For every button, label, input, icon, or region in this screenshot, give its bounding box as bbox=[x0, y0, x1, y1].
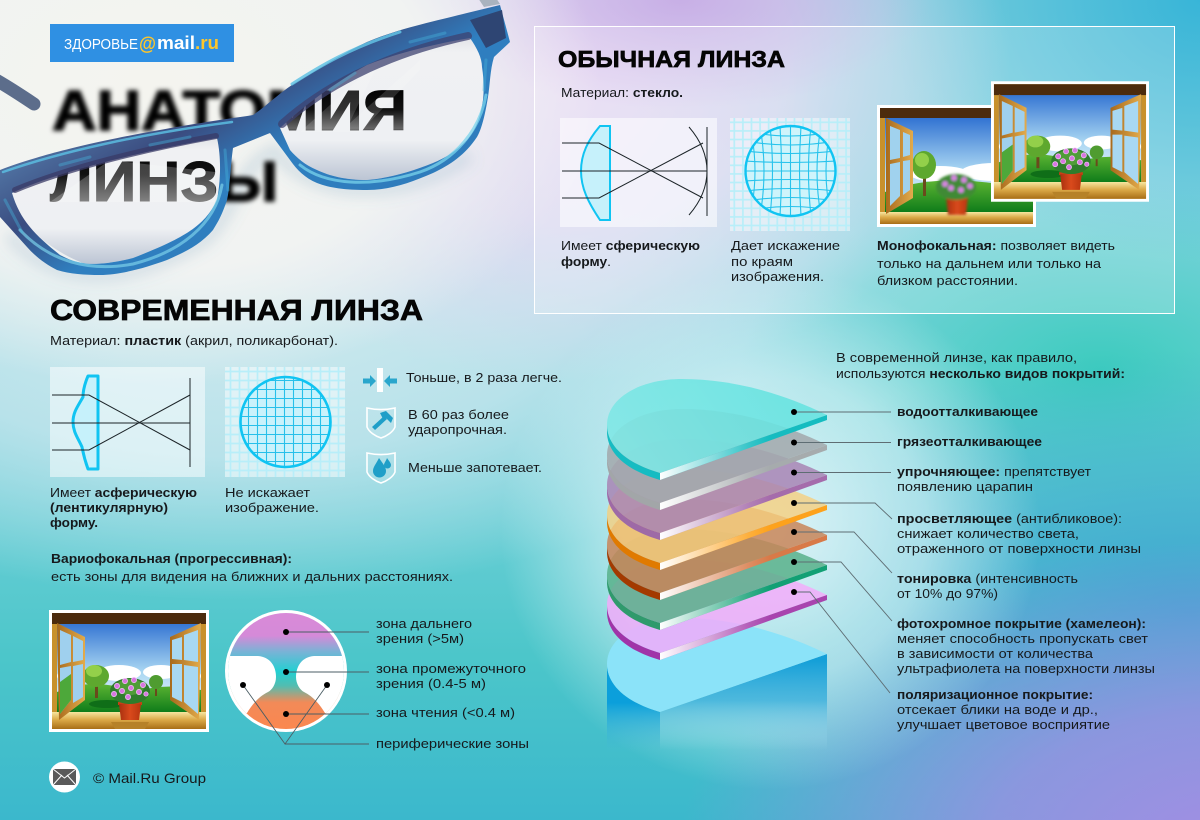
text: aspheric bbox=[50, 485, 197, 530]
title sharp inside left lens bbox=[50, 161, 216, 202]
glasses arm left bbox=[0, 80, 34, 104]
coatings list: отсекает блики на воде и др., bbox=[897, 702, 1098, 717]
frame highlights bbox=[3, 10, 506, 267]
heading: ОБЫЧНАЯ ЛИНЗА bbox=[558, 46, 785, 72]
texts: Дает искажение bbox=[731, 238, 840, 253]
coatings list: отраженного от поверхности линзы bbox=[897, 541, 1141, 556]
layer: photochromic bbox=[607, 529, 827, 630]
layer: dirt repellent bbox=[607, 409, 827, 510]
coatings list: улучшает цветовое восприятие bbox=[897, 717, 1110, 732]
text: impact: В 60 раз более bbox=[408, 407, 509, 422]
text: impact: ударопрочная. bbox=[408, 422, 507, 437]
zone labels: зона промежуточного bbox=[376, 661, 526, 676]
window illustration bbox=[49, 610, 209, 732]
layer: hardening bbox=[607, 439, 827, 540]
glasses arm top bbox=[478, 0, 500, 7]
texts bbox=[561, 238, 1115, 288]
text: varifocal: есть зоны для видения на ближних и дальних расстояниях. bbox=[51, 569, 453, 584]
window blurred flower bbox=[877, 105, 1036, 227]
zone labels: зрения (0.4-5 м) bbox=[376, 676, 486, 691]
text: no distortion: Не искажает bbox=[225, 485, 310, 500]
coatings intro: В современной линзе, как правило, bbox=[836, 350, 1077, 365]
zone labels: зрения (>5м) bbox=[376, 631, 464, 646]
coatings intro: используются несколько видов покрытий: bbox=[836, 366, 1125, 381]
zone labels: зона чтения (<0.4 м) bbox=[376, 705, 515, 720]
icon: thinner bbox=[363, 368, 397, 392]
panel: обычная линза bbox=[534, 26, 1174, 314]
coatings list: водоотталкивающее bbox=[897, 404, 1038, 419]
coatings intro bbox=[836, 350, 1125, 381]
texts: изображения. bbox=[731, 269, 824, 284]
texts: Имеет сферическую bbox=[561, 238, 700, 253]
title blurred bbox=[50, 79, 407, 214]
leaders bbox=[243, 632, 369, 744]
glasses shadow bbox=[8, 150, 470, 275]
coatings list: фотохромное покрытие (хамелеон): bbox=[897, 616, 1146, 631]
icon: drops shield bbox=[367, 453, 395, 483]
copyright: © Mail.Ru Group bbox=[93, 770, 206, 786]
layer: tint bbox=[607, 499, 827, 600]
layer: antireflective bbox=[607, 469, 827, 570]
material: Материал: стекло. bbox=[561, 85, 683, 100]
logo bbox=[50, 24, 234, 62]
coatings list: снижает количество света, bbox=[897, 526, 1079, 541]
text: thinner: Тоньше, в 2 раза легче. bbox=[406, 370, 562, 385]
texts: форму. bbox=[561, 254, 611, 269]
zone labels bbox=[376, 616, 529, 751]
text: aspheric: (лентикулярную) bbox=[50, 500, 168, 515]
coatings list: ультрафиолета на поверхности линзы bbox=[897, 661, 1155, 676]
layer: water repellent bbox=[607, 379, 827, 480]
glasses frame bbox=[0, 5, 510, 275]
text: impact bbox=[408, 407, 509, 437]
title sharp inside lenses bbox=[286, 90, 404, 130]
coatings list: упрочняющее: препятствует bbox=[897, 464, 1091, 479]
icon: envelope bbox=[49, 762, 80, 792]
text: aspheric: Имеет асферическую bbox=[50, 485, 197, 500]
lens left bbox=[12, 138, 220, 264]
texts: Монофокальная: позволяет видеть bbox=[877, 238, 1115, 253]
heading: современная линза: СОВРЕМЕННАЯ ЛИНЗА bbox=[50, 295, 423, 327]
glasses and title bbox=[0, 0, 510, 275]
coatings list: в зависимости от количества bbox=[897, 646, 1094, 661]
coatings list: меняет способность пропускать свет bbox=[897, 631, 1148, 646]
zone labels: зона дальнего bbox=[376, 616, 472, 631]
texts: близком расстоянии. bbox=[877, 273, 1018, 288]
texts: по краям bbox=[731, 254, 793, 269]
logo: @ bbox=[139, 34, 156, 55]
text: no distortion bbox=[225, 485, 319, 515]
text: varifocal bbox=[51, 551, 453, 584]
text: fog: Меньше запотевает. bbox=[408, 460, 542, 475]
logo: mail bbox=[157, 33, 195, 53]
layer: polarizing bbox=[607, 559, 827, 660]
spherical lens diagram bbox=[560, 118, 717, 227]
zone labels: периферические зоны bbox=[376, 736, 529, 751]
coatings list bbox=[897, 404, 1155, 732]
title sharp inside left lens: ЛИНЗЫ bbox=[50, 150, 278, 214]
logo: .ru bbox=[195, 33, 219, 53]
window sharp flower bbox=[991, 81, 1149, 202]
icon: hammer shield bbox=[367, 408, 395, 438]
coatings list: от 10% до 97%) bbox=[897, 586, 998, 601]
base lens bbox=[607, 618, 827, 800]
material plastic: Материал: пластик (акрил, поликарбонат). bbox=[50, 333, 338, 348]
leaders bbox=[794, 412, 892, 693]
dots bbox=[791, 409, 797, 595]
coatings list: тонировка (интенсивность bbox=[897, 571, 1078, 586]
regular grid bbox=[225, 367, 345, 477]
distorted grid bbox=[730, 118, 850, 231]
texts: только на дальнем или только на bbox=[877, 256, 1102, 271]
text: varifocal: Вариофокальная (прогрессивная): bbox=[51, 551, 292, 566]
dots bbox=[240, 629, 330, 717]
aspheric lens diagram bbox=[50, 367, 205, 477]
title sharp inside lenses: АНАТОМИЯ bbox=[52, 79, 407, 143]
text: aspheric: форму. bbox=[50, 515, 98, 530]
coatings list: появлению царапин bbox=[897, 479, 1033, 494]
coatings list: поляризационное покрытие: bbox=[897, 687, 1093, 702]
coatings list: просветляющее (антибликовое): bbox=[897, 511, 1122, 526]
progressive lens bbox=[222, 610, 369, 744]
text: no distortion: изображение. bbox=[225, 500, 319, 515]
lens right bbox=[280, 38, 484, 180]
title blurred: ЛИНЗЫ bbox=[50, 150, 278, 214]
title blurred: АНАТОМИЯ bbox=[52, 79, 407, 143]
logo: ЗДОРОВЬЕ bbox=[64, 37, 138, 53]
coatings list: грязеотталкивающее bbox=[897, 434, 1042, 449]
layered lens stack bbox=[607, 379, 892, 800]
